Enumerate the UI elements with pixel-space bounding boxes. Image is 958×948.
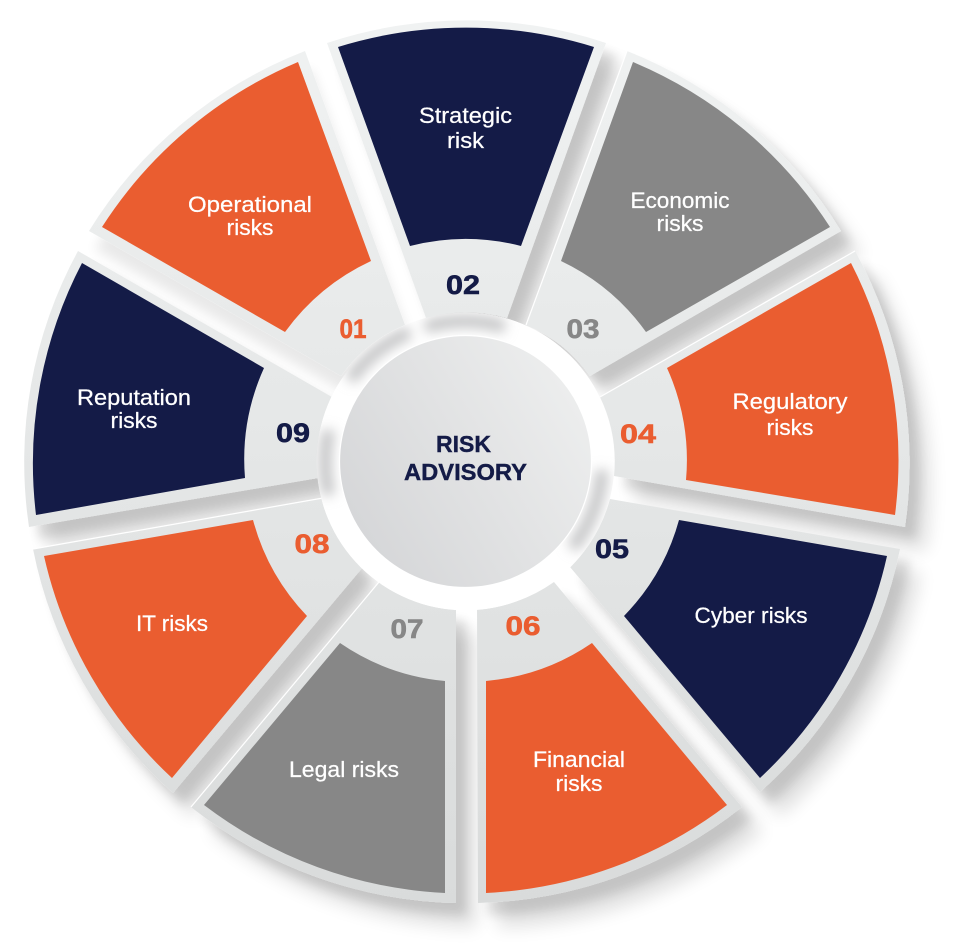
- segment 05 number: 05: [595, 534, 629, 564]
- segment 07 colour block: [204, 643, 445, 893]
- segment 03 base: [526, 51, 841, 376]
- segment 06 label: risks: [556, 771, 602, 796]
- segment 08 base: [33, 498, 363, 793]
- segment 06 number: 06: [506, 611, 540, 641]
- segment 01 label: Operational: [188, 192, 312, 217]
- segment 07 number: 07: [390, 614, 424, 644]
- segment 09 label: risks: [110, 408, 158, 433]
- panel: segment 01 operational risks: [89, 51, 405, 376]
- panel: segment 09 reputation risks: [24, 251, 332, 527]
- segment 02 label: Strategic: [419, 103, 512, 128]
- segment 05 colour block: [624, 520, 887, 778]
- segment 03 edge highlight: [526, 51, 627, 325]
- segment 06 colour block: [486, 643, 727, 893]
- panel: segment 04 regulatory risks: [600, 251, 910, 527]
- hub bevel ring: [316, 312, 614, 610]
- segment 02 colour block: [338, 28, 594, 246]
- segment 03 label: Economic: [630, 188, 730, 213]
- segment 02 label: risk: [447, 128, 485, 153]
- segment 04 number: 04: [620, 419, 656, 449]
- segment 05 base: [570, 499, 900, 792]
- segment 01 colour block: [102, 62, 371, 332]
- segment 08 colour block: [44, 520, 307, 778]
- segment 07 edge highlight: [191, 582, 379, 807]
- segment 01 number: 01: [340, 314, 366, 344]
- panel: segment 05 cyber risks: [570, 499, 900, 792]
- segment 09 number: 09: [276, 418, 310, 448]
- segment 04 label: Regulatory: [732, 389, 848, 414]
- segment 07 label: Legal risks: [289, 757, 399, 782]
- segment 06 base: [477, 582, 742, 903]
- segment 04 base: [600, 251, 910, 527]
- segment 08 number: 08: [294, 529, 330, 559]
- hub title: ADVISORY: [404, 459, 527, 485]
- panel: central hub: [316, 312, 614, 610]
- segment 02 base: [327, 20, 606, 318]
- panel: segment 02 strategic risk: [327, 20, 606, 318]
- segment 05 label: Cyber risks: [694, 603, 808, 628]
- segment 04 label: risks: [766, 415, 814, 440]
- segment 08 label: IT risks: [136, 611, 208, 636]
- segment 03 label: risks: [656, 211, 704, 236]
- panel: segment 07 legal risks: [191, 582, 456, 903]
- segment 06 label: Financial: [533, 747, 625, 772]
- segment 04 colour block: [667, 263, 898, 515]
- panel: segment 06 financial risks: [477, 582, 742, 903]
- segment 01 base: [89, 51, 405, 376]
- segment 09 label: Reputation: [77, 385, 191, 410]
- segment 01 label: risks: [226, 215, 274, 240]
- segment 08 edge highlight: [33, 498, 323, 549]
- hub title: RISK: [436, 431, 491, 457]
- segment 09 base: [24, 251, 332, 527]
- segment 09 colour block: [33, 263, 264, 515]
- segment 04 edge highlight: [600, 251, 855, 397]
- segment 03 number: 03: [566, 314, 600, 344]
- segment 02 number: 02: [446, 270, 480, 300]
- segment 07 base: [191, 582, 456, 903]
- segment 03 colour block: [561, 62, 830, 332]
- hub disc: [340, 336, 592, 588]
- panel: segment 03 economic risks: [526, 51, 841, 376]
- panel: segment 08 IT risks: [33, 498, 363, 793]
